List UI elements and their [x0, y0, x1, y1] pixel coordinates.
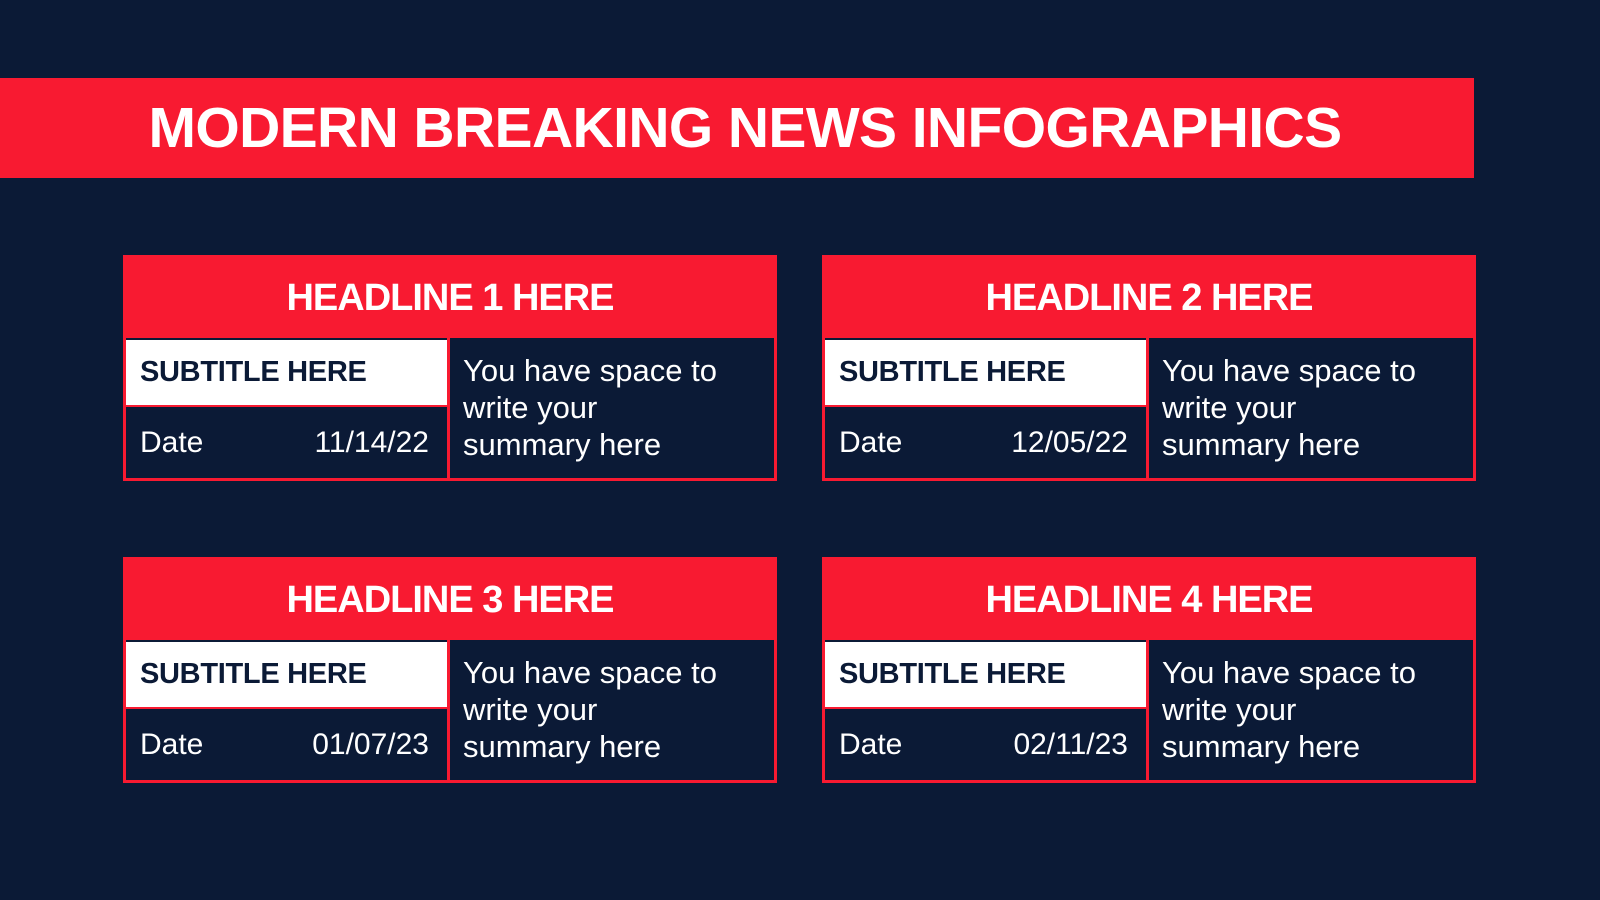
date 2: Date	[839, 426, 902, 459]
panel: headline 3	[123, 557, 777, 783]
subtitle 4	[825, 642, 1146, 707]
panel: headline 4	[822, 557, 1476, 783]
headline 2: HEADLINE 2 HERE	[985, 277, 1313, 319]
date 1: Date	[140, 426, 203, 459]
date 3	[140, 728, 429, 761]
subtitle 2: SUBTITLE HERE	[839, 356, 1066, 388]
date 3: 01/07/23	[312, 728, 429, 761]
date 4: 02/11/23	[1013, 728, 1128, 761]
date 4	[839, 728, 1128, 761]
headline 3: HEADLINE 3 HERE	[286, 579, 614, 621]
headline 1: HEADLINE 1 HERE	[286, 277, 614, 319]
panel: headline 2	[822, 255, 1476, 481]
subtitle 3: SUBTITLE HERE	[140, 658, 367, 690]
headline 1	[126, 258, 774, 338]
subtitle 4: SUBTITLE HERE	[839, 658, 1066, 690]
headline 3	[126, 560, 774, 640]
summary 4: You have space to write your summary here	[1162, 655, 1416, 764]
subtitle 3	[126, 642, 447, 707]
date 2	[839, 426, 1128, 459]
title bar	[0, 78, 1474, 178]
headline 4	[825, 560, 1473, 640]
title bar: MODERN BREAKING NEWS INFOGRAPHICS	[148, 96, 1342, 160]
subtitle 1	[126, 340, 447, 405]
panel: headline 1	[123, 255, 777, 481]
headline 2	[825, 258, 1473, 338]
summary 2: You have space to write your summary here	[1162, 353, 1416, 462]
subtitle 2	[825, 340, 1146, 405]
headline 4: HEADLINE 4 HERE	[985, 579, 1313, 621]
date 1	[140, 426, 429, 459]
date 3: Date	[140, 728, 203, 761]
summary 1: You have space to write your summary here	[463, 353, 717, 462]
summary 3: You have space to write your summary here	[463, 655, 717, 764]
subtitle 1: SUBTITLE HERE	[140, 356, 367, 388]
date 4: Date	[839, 728, 902, 761]
date 1: 11/14/22	[314, 426, 429, 459]
date 2: 12/05/22	[1011, 426, 1128, 459]
